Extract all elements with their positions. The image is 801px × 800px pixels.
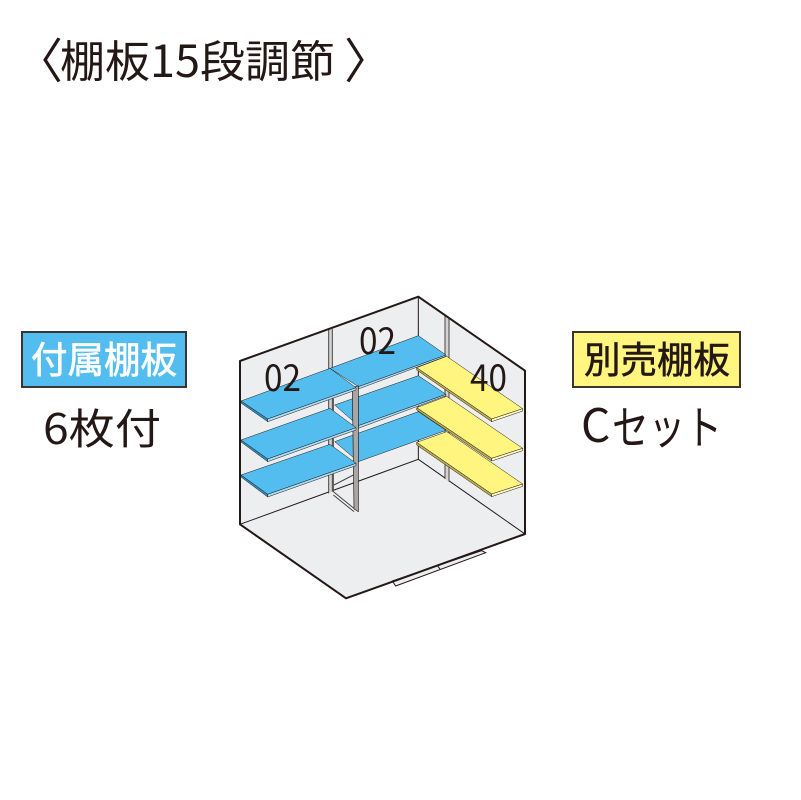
text: C set: セット xyxy=(612,392,722,458)
outer frame xyxy=(240,297,525,598)
title: 棚板15段調節 xyxy=(60,26,335,90)
shelf code: center: 02 xyxy=(359,313,396,365)
label: included shelves: 付属棚板 xyxy=(31,330,177,384)
shelf code: left: 02 xyxy=(264,350,301,402)
walls and floor xyxy=(240,297,525,598)
text: C set: C xyxy=(581,390,610,456)
text: 6 pieces included: 6枚付 xyxy=(43,396,161,457)
blue shelves, left row xyxy=(241,368,356,497)
center post xyxy=(333,386,358,512)
title: 〉 xyxy=(344,22,392,92)
title xyxy=(15,22,392,92)
yellow shelves xyxy=(417,356,523,497)
label: sold separately shelves: 別売棚板 xyxy=(584,330,730,384)
text: C set xyxy=(581,390,722,458)
storage unit diagram xyxy=(240,297,525,598)
title: 〈 xyxy=(15,22,63,92)
shelf code: right: 40 xyxy=(470,350,507,402)
blue shelves, back row xyxy=(330,336,446,462)
